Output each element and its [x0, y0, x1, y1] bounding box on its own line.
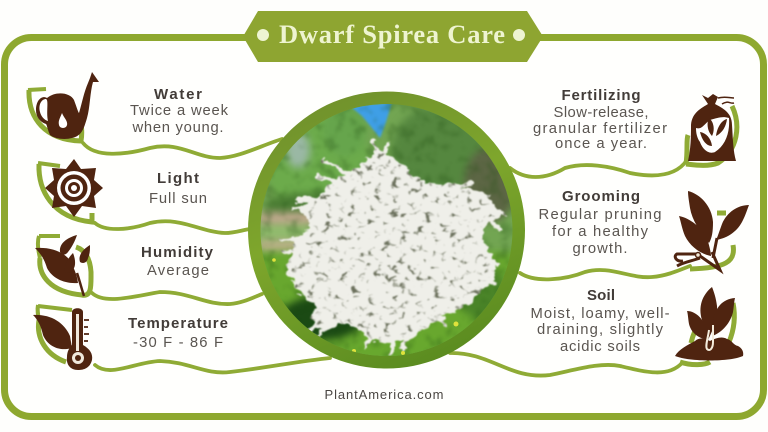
water item — [28, 72, 229, 141]
grooming heading: Grooming — [562, 188, 640, 205]
photo ring — [248, 92, 525, 368]
water text: Twice a week — [130, 103, 229, 119]
water heading: Water — [154, 86, 202, 103]
fertilizing item — [533, 87, 737, 165]
light text: Full sun — [149, 191, 207, 207]
water item: when young. — [132, 120, 224, 136]
grooming text: Regular pruning — [538, 207, 662, 223]
icon: thermometer and leaf — [33, 305, 92, 370]
yellow flowers — [272, 258, 458, 355]
soil item: draining, slightly — [537, 322, 664, 338]
temperature item — [33, 305, 228, 370]
fertilizing text: Slow-release, — [554, 105, 648, 121]
soil item: acidic soils — [560, 339, 640, 355]
soil text: Moist, loamy, well- — [530, 306, 670, 322]
icon: watering can — [28, 72, 99, 141]
light heading: Light — [157, 170, 199, 187]
fertilizing item: granular fertilizer — [533, 121, 667, 137]
soil item — [530, 287, 743, 365]
light item — [38, 159, 207, 222]
humidity heading: Humidity — [141, 244, 214, 261]
fertilizing item: once a year. — [555, 136, 647, 152]
humidity item — [35, 235, 214, 296]
sky — [350, 102, 392, 138]
source credit: PlantAmerica.com — [324, 387, 444, 402]
icon: pruning shears and leaves — [675, 191, 749, 270]
connector curves — [83, 139, 690, 376]
grooming item — [538, 188, 749, 270]
grooming item: growth. — [572, 241, 628, 257]
humidity text: Average — [147, 263, 209, 279]
icon: humidity leaves — [35, 235, 91, 296]
flowering shrub — [282, 140, 506, 352]
soil heading: Soil — [587, 287, 615, 304]
icon: seedling in soil — [675, 287, 743, 365]
icon: sun — [38, 159, 103, 222]
central photo — [248, 92, 525, 370]
temperature heading: Temperature — [128, 315, 228, 332]
grooming item: for a healthy — [552, 224, 649, 240]
trees and ground — [258, 104, 518, 370]
title banner — [243, 11, 543, 62]
temperature text: -30 F - 86 F — [133, 335, 223, 351]
title: Dwarf Spirea Care — [279, 19, 505, 49]
icon: fertilizer bag — [686, 94, 737, 165]
fertilizing heading: Fertilizing — [562, 87, 640, 104]
